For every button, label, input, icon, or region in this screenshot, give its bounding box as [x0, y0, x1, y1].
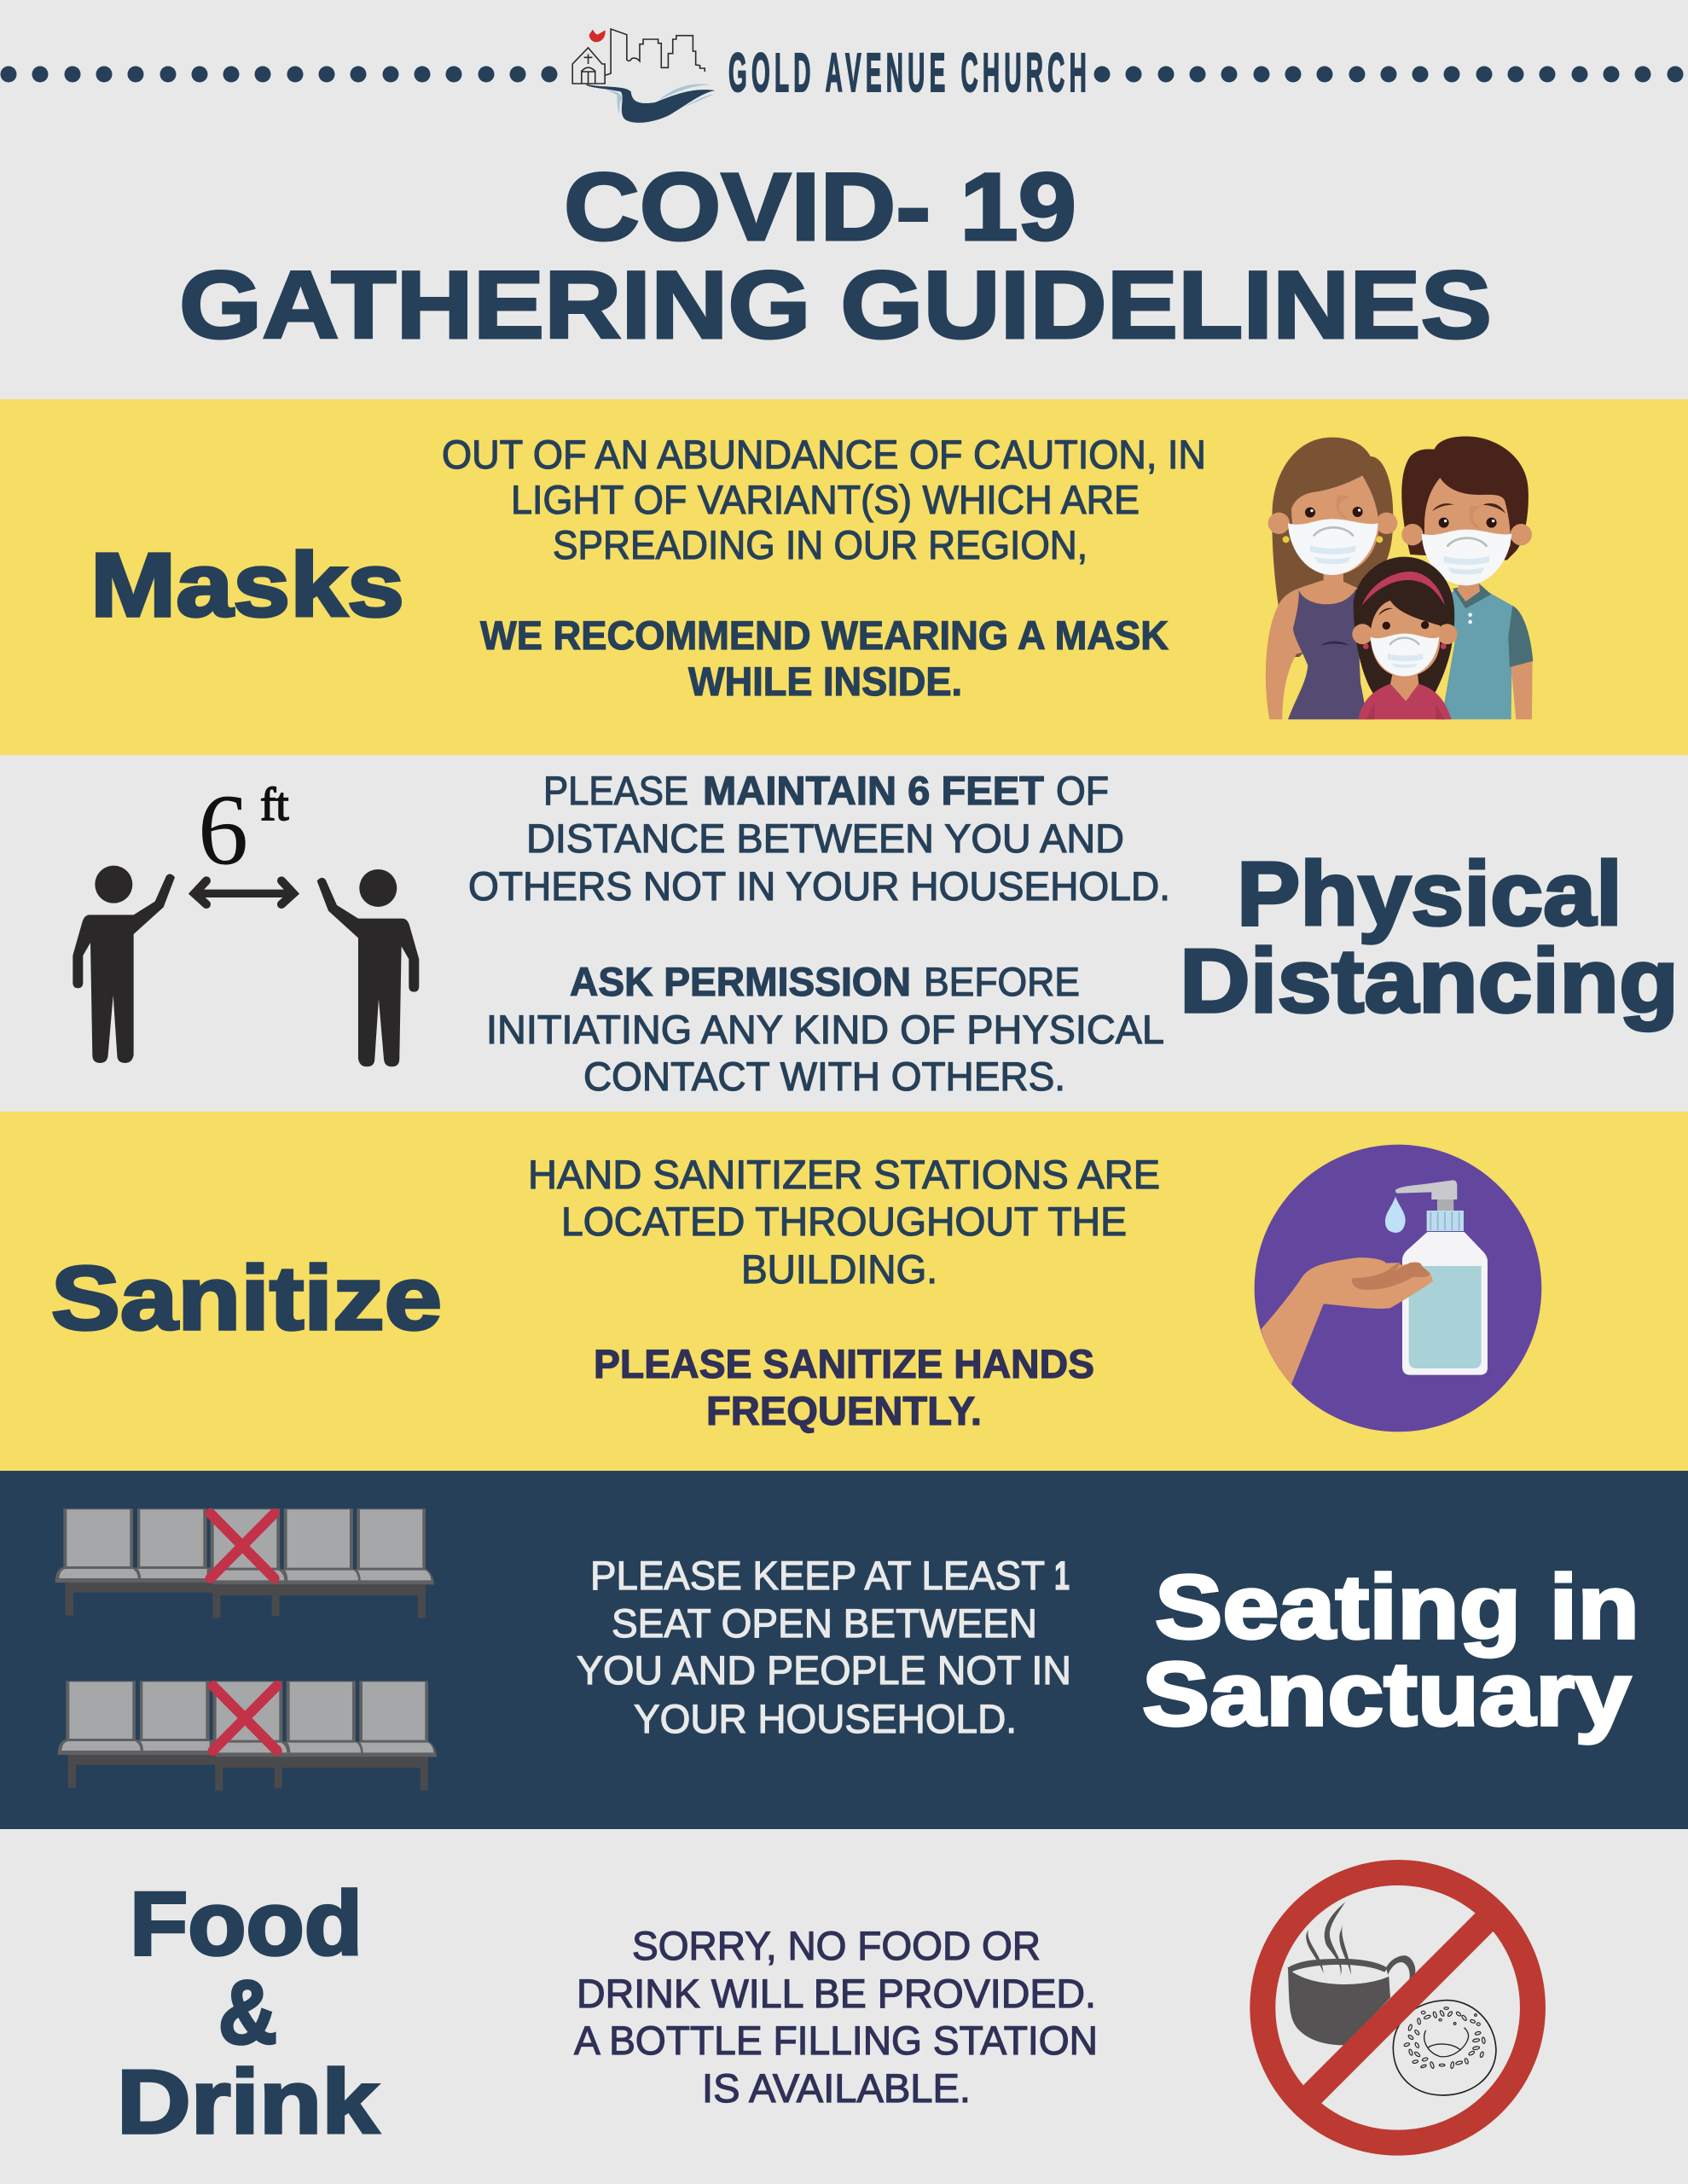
text block: food and drink notice: SORRY, NO FOOD OR — [632, 1923, 1041, 1968]
text block: sanitizer guidance: HAND SANITIZER STATIONS ARE — [528, 1152, 1160, 1197]
heading: masks: Masks — [90, 535, 404, 636]
text block: seating guidance: YOUR HOUSEHOLD. — [634, 1696, 1017, 1741]
text block: seating guidance: YOU AND PEOPLE NOT IN — [577, 1647, 1071, 1693]
text block: masks guidance: OUT OF AN ABUNDANCE OF CAUTION, IN — [442, 432, 1206, 477]
text block: distancing guidance: INITIATING ANY KIND OF PHYSICAL — [486, 1007, 1164, 1052]
text block: masks guidance: WE RECOMMEND WEARING A MASK — [480, 613, 1169, 658]
text block: distancing guidance: OF — [1056, 768, 1109, 813]
header: dotted rule and church logo — [0, 29, 1684, 123]
heading: seating in sanctuary: Sanctuary — [1142, 1644, 1631, 1745]
heading: sanitize: Sanitize — [51, 1248, 442, 1349]
heading: physical distancing: Distancing — [1180, 931, 1679, 1031]
heading: food and drink: Drink — [117, 2052, 380, 2152]
header: dotted rule and church logo: GOLD AVENUE CHURCH — [728, 42, 1091, 103]
text block: sanitizer guidance: PLEASE SANITIZE HANDS — [594, 1341, 1094, 1386]
icon: church and skyline logo — [572, 29, 715, 123]
text block: distancing guidance: MAINTAIN 6 FEET — [703, 768, 1044, 813]
heading: food and drink — [117, 1873, 380, 2152]
panel: physical distancing — [73, 768, 1679, 1099]
text block: distancing guidance: BEFORE — [924, 959, 1080, 1004]
heading: food and drink: & — [218, 1962, 277, 2063]
icon: no food or drink sign — [1262, 1873, 1533, 2143]
text block: food and drink notice: A BOTTLE FILLING STATION — [574, 2018, 1098, 2063]
text block: distancing guidance: ASK PERMISSION — [570, 959, 911, 1004]
text block: distancing guidance: CONTACT WITH OTHERS. — [583, 1054, 1065, 1099]
panel: seating in sanctuary — [0, 1471, 1688, 1829]
text block: food and drink notice: DRINK WILL BE PROVIDED. — [577, 1971, 1096, 2016]
text block: seating guidance: 1 — [1054, 1553, 1070, 1598]
text block: sanitizer guidance: BUILDING. — [741, 1246, 937, 1292]
text block: food and drink notice — [574, 1923, 1098, 2111]
title: GATHERING GUIDELINES — [179, 252, 1492, 358]
icon: two people six feet apart: 6 — [198, 775, 248, 886]
title: COVID- 19 — [564, 154, 1076, 260]
text block: distancing guidance: PLEASE — [543, 768, 688, 813]
text block: sanitizer guidance: LOCATED THROUGHOUT THE — [561, 1199, 1127, 1244]
text block: masks guidance: SPREADING IN OUR REGION, — [553, 522, 1088, 567]
icon: row of seats with crossed seat, bottom — [58, 1681, 437, 1791]
text block: distancing guidance — [468, 768, 1170, 1099]
icon: two people six feet apart — [73, 775, 419, 1066]
title — [179, 154, 1492, 358]
text block: masks guidance: WHILE INSIDE. — [688, 659, 962, 704]
icon: hand sanitizer pump — [1255, 1145, 1541, 1432]
icon: row of seats with crossed seat, top — [55, 1508, 434, 1618]
text block: sanitizer guidance — [528, 1152, 1160, 1433]
heading: food and drink: Food — [130, 1873, 363, 1974]
text block: distancing guidance: DISTANCE BETWEEN YOU AND — [526, 816, 1124, 861]
dotted rule right — [1093, 67, 1684, 82]
text block: seating guidance: PLEASE KEEP AT LEAST — [590, 1553, 1045, 1598]
icon: two people six feet apart: ft — [260, 778, 289, 830]
text block: sanitizer guidance: FREQUENTLY. — [706, 1388, 982, 1433]
text block: distancing guidance: OTHERS NOT IN YOUR HOUSEHOLD. — [468, 863, 1170, 909]
text block: food and drink notice: IS AVAILABLE. — [702, 2065, 971, 2111]
text block: seating guidance — [577, 1553, 1071, 1741]
icon: family wearing masks — [1266, 437, 1533, 719]
panel: masks — [0, 399, 1688, 755]
heading: physical distancing: Physical — [1237, 844, 1622, 944]
panel: food and drink — [117, 1873, 1533, 2152]
text block: seating guidance: SEAT OPEN BETWEEN — [612, 1600, 1037, 1646]
dotted rule left — [0, 67, 558, 82]
text block: masks guidance: LIGHT OF VARIANT(S) WHICH ARE — [511, 477, 1140, 522]
text block: masks guidance — [442, 432, 1206, 704]
panel: sanitize — [0, 1112, 1688, 1471]
heading: seating in sanctuary: Seating in — [1155, 1557, 1639, 1658]
heading: seating in sanctuary — [1142, 1557, 1639, 1745]
heading: physical distancing — [1180, 844, 1679, 1031]
